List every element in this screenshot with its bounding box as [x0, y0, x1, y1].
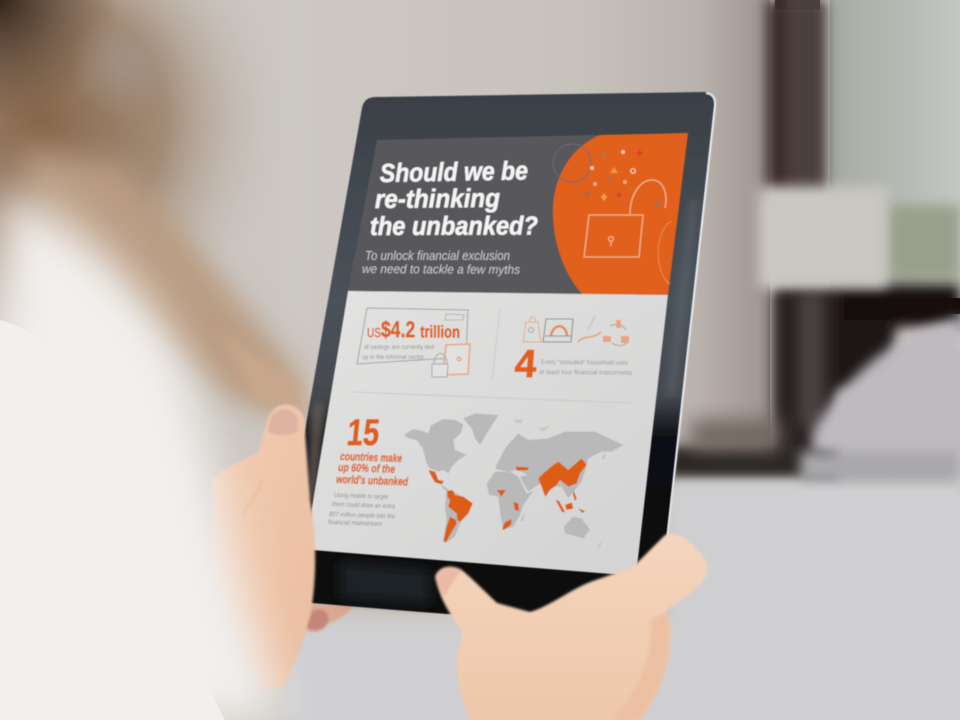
bezel reflection [306, 402, 325, 510]
left hand [212, 404, 315, 690]
blurred hair [0, 0, 330, 420]
heading [370, 155, 538, 241]
header panel [348, 133, 688, 295]
background: dark headboard band [668, 285, 960, 480]
screen content [306, 133, 688, 576]
stat: 4: 4 [513, 343, 538, 386]
right bezel highlight [667, 200, 698, 395]
right palm and fingers [435, 534, 708, 720]
stat caption: financial mainstream [328, 519, 383, 528]
savings caption [362, 344, 434, 361]
left hand palm and fingers [212, 404, 315, 690]
right thumbnail [436, 568, 462, 597]
instruments caption: at least four financial instruments [539, 369, 633, 377]
stat: US$4.2 trillion: US$4.2 trillion [367, 316, 460, 343]
subheading [362, 249, 520, 277]
icon: padlock [432, 354, 448, 377]
icon: hand and coin [578, 316, 601, 342]
number 15: 15 [345, 411, 382, 453]
world map [404, 413, 623, 547]
background: pillow [812, 318, 960, 466]
savings caption: of savings are currently tied [364, 344, 434, 351]
decorative ring [553, 144, 591, 182]
heading: re-thinking [375, 183, 500, 214]
heading: Should we be [380, 155, 528, 188]
left thumbnail [268, 409, 298, 435]
background: wall shadow above floor [690, 420, 780, 450]
stat caption [328, 492, 395, 528]
stat caption: 807 million people into the [329, 511, 395, 520]
right hand [435, 534, 708, 720]
stat heading: world's unbanked [336, 474, 409, 489]
tablet silver edge [667, 93, 715, 540]
map: Americas [404, 413, 498, 542]
icon: bag [523, 317, 541, 342]
card slot [445, 314, 464, 320]
financial instruments stat [513, 316, 633, 386]
stat caption: them could draw an extra [332, 501, 395, 510]
instruments caption: Every "excluded" household uses [541, 359, 629, 367]
instruments caption [539, 359, 633, 377]
icon: safe [443, 344, 470, 375]
stat heading: countries make [340, 451, 403, 465]
card outline [357, 308, 468, 364]
savings caption: up in the informal sector [362, 354, 424, 361]
tablet [275, 92, 715, 614]
map: Africa, Eurasia, Oceania [487, 419, 623, 547]
divider [492, 310, 500, 380]
icon: open padlock [584, 180, 666, 257]
background: bed [285, 620, 685, 720]
lower panel [306, 291, 668, 576]
stat caption: Using mobile to target [334, 492, 389, 501]
separator [352, 392, 632, 403]
orange circle [553, 133, 688, 295]
background: dark post blurred [765, 0, 827, 200]
subheading: To unlock financial exclusion [365, 249, 510, 263]
icon: sparkles [584, 149, 661, 207]
stat: 15 countries [328, 411, 409, 528]
left fingers behind tablet [304, 604, 352, 632]
stat heading: up 60% of the [338, 462, 396, 476]
subheading: we need to tackle a few myths [362, 262, 520, 277]
blurred white shoulder foreground [0, 190, 285, 720]
left thumb crease [243, 480, 262, 515]
right hand shading [612, 612, 670, 720]
icon: cycle of notes [603, 320, 629, 346]
background: green wall [830, 0, 960, 290]
heading: the unbanked? [370, 210, 538, 241]
card with savings stat [357, 308, 470, 377]
icon: open briefcase [543, 319, 573, 342]
bezel bottom tint [340, 562, 430, 604]
background: dark post upper [775, 0, 820, 10]
stat heading [336, 451, 409, 489]
tablet body [275, 92, 715, 614]
background: lamp shade [758, 186, 888, 288]
decorative ring right [658, 221, 672, 284]
